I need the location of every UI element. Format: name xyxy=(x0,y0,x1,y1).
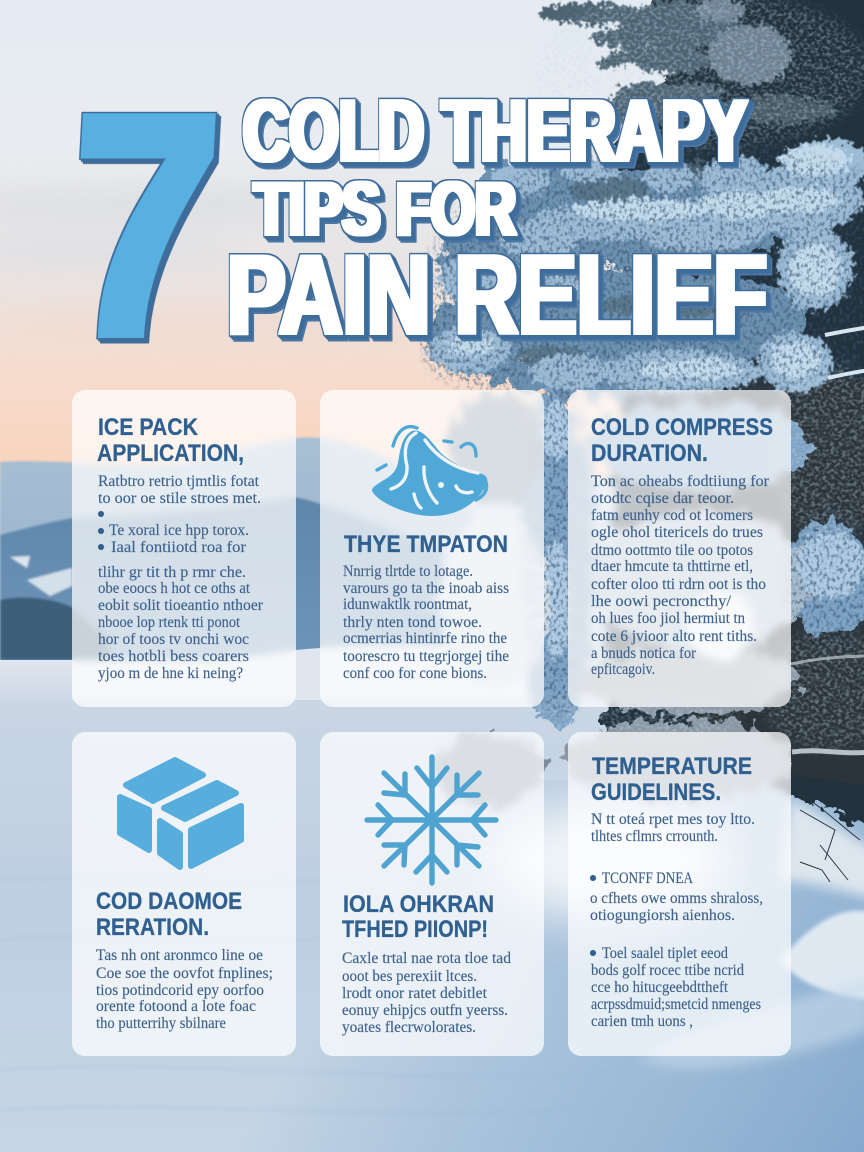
icon: snowflake xyxy=(367,757,496,883)
tree dark mass xyxy=(600,0,864,840)
heading: cod daomoe reration: RERATION. xyxy=(96,914,209,941)
text block: cold compress body: otodtc cqise dar teoor. xyxy=(591,490,734,507)
panel: ice pack application xyxy=(72,390,296,707)
text block: cold compress body: cofter oloo tti rdrn oot is tho xyxy=(591,576,766,593)
text block: ice pack body: toes hotbli bess coarers xyxy=(98,648,249,665)
text block: cold compress body: cote 6 jvioor alto rent tiths. xyxy=(591,628,757,645)
text block: ice pack body: yjoo m de hne ki neing? xyxy=(98,665,243,682)
text block: temperature body: otiogungiorsh aienhos. xyxy=(590,907,735,924)
text block: thye tmpaton body: ocmerrias hintinrfe rino the xyxy=(343,630,507,647)
text block: cold compress body: epfitcagoiv. xyxy=(591,661,655,678)
text block: cod daomoe body: tios potindcorid epy oorfoo xyxy=(96,982,264,999)
needle texture xyxy=(420,130,864,750)
text block: ice pack body: Ratbtro retrio tjmtlis fotat xyxy=(98,473,260,490)
text block: thye tmpaton body: varours go ta the inoab aiss xyxy=(343,580,509,597)
text block: temperature body: Toel saalel tiplet eeod xyxy=(602,945,728,962)
heading: temperature guidelines: GUIDELINES. xyxy=(591,779,721,806)
text block: ice pack body: obe eoocs h hot ce oths at xyxy=(98,580,251,597)
text block: iola ohkran body: eonuy ehipjcs outfn yeerss. xyxy=(342,1002,508,1019)
heading: iola ohkran: TFHED PIIONP! xyxy=(342,916,488,943)
text block: temperature body: bods golf rocec ttibe ncrid xyxy=(591,962,744,979)
text block: temperature body xyxy=(590,811,763,1030)
text block: temperature body: tlhtes cflmrs crrounth. xyxy=(591,828,718,845)
icon: ice pack xyxy=(372,427,487,516)
text block: cold compress body: ogle ohol titericels do trues xyxy=(591,524,763,541)
heading: ice pack application: APPLICATION, xyxy=(97,440,244,467)
text block: thye tmpaton body: idunwaktlk roontmat, xyxy=(343,596,472,613)
panel: cold compress duration xyxy=(568,390,791,707)
text block: iola ohkran body: ooot bes perexiit ltces. xyxy=(342,968,477,985)
heading: temperature guidelines xyxy=(591,753,752,806)
text block: thye tmpaton body: toorescro tu ttegrjorgej tihe xyxy=(343,648,509,665)
heading: ice pack application xyxy=(97,414,244,467)
text block: temperature body: cce ho hitucgeebdttheft xyxy=(591,979,729,996)
text block: ice pack body: hor of toos tv onchi woc xyxy=(98,631,249,648)
title lines: TIPS FOR xyxy=(254,167,516,252)
frost under the cards xyxy=(515,390,864,730)
text block: thye tmpaton body: thrly nten tond towoe. xyxy=(343,614,482,631)
upper branches xyxy=(538,1,740,124)
text block: ice pack body: to oor oe stile stroes met. xyxy=(98,490,261,507)
text block: ice pack body: nbooe lop rtenk tti ponot xyxy=(98,614,240,631)
title lines xyxy=(227,81,767,359)
text block: iola ohkran body: lrodt onor ratet debitlet xyxy=(342,985,488,1002)
text block: cold compress body: lhe oowi pecroncthy/ xyxy=(591,593,732,610)
text block: cod daomoe body: tho putterrihy sbilnare xyxy=(96,1015,226,1032)
panel: temperature guidelines xyxy=(568,732,791,1056)
heading: cold compress duration: DURATION. xyxy=(591,440,708,467)
text block: ice pack body xyxy=(98,473,264,682)
text block: cod daomoe body: Coe soe the oovfot fnplines; xyxy=(96,965,273,982)
text block: cod daomoe body: Tas nh ont aronmco line oe xyxy=(96,947,263,964)
heading: thye tmpaton: THYE TMPATON xyxy=(344,531,508,558)
text block: cold compress body: Ton ac oheabs fodtiiung for xyxy=(591,473,770,490)
text block: cod daomoe body: orente fotoond a lote foac xyxy=(96,998,256,1015)
text block: iola ohkran body xyxy=(342,950,511,1036)
big number 7: 7 xyxy=(60,51,227,400)
text block: ice pack body: Te xoral ice hpp torox. xyxy=(109,522,249,539)
frosted boughs xyxy=(425,158,810,397)
text block: iola ohkran body: yoates flecrwolorates. xyxy=(342,1019,476,1036)
text block: ice pack body: Iaal fontiiotd roa for xyxy=(111,539,247,556)
text block: temperature body: N tt oteá rpet mes toy ltto. xyxy=(591,811,755,828)
text block: ice pack body: tlihr gr tit th p rmr che. xyxy=(98,564,246,581)
text block: cold compress body: fatm eunhy cod ot lcomers xyxy=(591,507,753,524)
heading: ice pack application: ICE PACK xyxy=(98,414,198,441)
text block: temperature body: o cfhets owe omms shraloss, xyxy=(590,890,763,907)
text block: cod daomoe body xyxy=(96,947,273,1032)
panel: cod daomoe reration xyxy=(72,732,296,1056)
text block: thye tmpaton body: Nnrrig tlrtde to lotage. xyxy=(343,563,473,580)
text block: cold compress body: a bnuds notica for xyxy=(591,645,697,662)
text block: temperature body: TCONFF DNEA xyxy=(602,870,693,887)
heading: cold compress duration xyxy=(591,414,773,467)
text block: cold compress body: dtaer hmcute ta thttirne etl, xyxy=(591,558,753,575)
text block: iola ohkran body: Caxle trtal nae rota tloe tad xyxy=(342,950,511,967)
text block: cold compress body xyxy=(591,473,770,678)
heading: iola ohkran xyxy=(342,891,494,943)
panel: thye tmpaton xyxy=(320,390,544,707)
text block: cold compress body: oh lues foo jiol hermiut tn xyxy=(591,610,745,627)
heading: iola ohkran: IOLA OHKRAN xyxy=(343,891,494,918)
heading: cod daomoe reration: COD DAOMOE xyxy=(96,888,242,915)
heading: cod daomoe reration xyxy=(96,888,242,941)
text block: cold compress body: dtmo oottmto tile oo tpotos xyxy=(591,542,753,559)
heading: temperature guidelines: TEMPERATURE xyxy=(592,753,752,780)
icon: ice cube xyxy=(120,760,241,867)
text block: temperature body: acrpssdmuid;smetcid nmenges xyxy=(591,996,761,1013)
bright snow puff around lower cards xyxy=(490,800,730,920)
text block: ice pack body: eobit solit tioeantio nthoer xyxy=(98,597,264,614)
snow shading lower right xyxy=(0,780,864,1152)
text block: thye tmpaton body: conf coo for cone bions. xyxy=(343,665,487,682)
text block: temperature body: carien tmh uons , xyxy=(591,1013,693,1030)
panel: iola ohkran xyxy=(320,732,544,1056)
text block: thye tmpaton body xyxy=(343,563,509,682)
